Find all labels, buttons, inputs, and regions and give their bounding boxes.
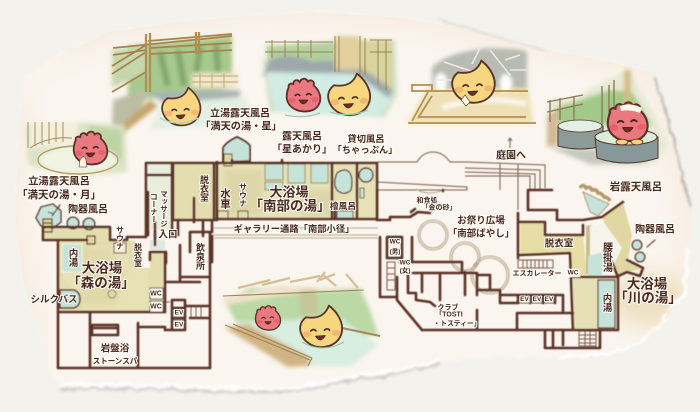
label: 飲泉所: 飲泉所: [195, 242, 205, 271]
label: トスティー: ・トスティー」: [433, 320, 481, 328]
illustration: stone tub bath: [408, 48, 536, 123]
label: 立湯露天風呂 月: 立湯露天風呂: [28, 174, 90, 188]
peach wash: [18, 16, 688, 336]
label: TOSTI: 「TOSTI: [435, 310, 463, 318]
label: EV upper: EV: [175, 310, 184, 316]
thin walls and circles: [92, 152, 596, 346]
baths: 川の湯: [580, 186, 645, 328]
label: 庭園へ: 庭園へ: [496, 148, 526, 162]
arrow to garden: [508, 138, 512, 148]
label: 脱衣室 east: 脱衣室: [545, 238, 573, 250]
illustration: rotenburo 星あかり: [263, 36, 397, 117]
label: エスカレーター: エスカレーター: [512, 268, 562, 278]
label: 満天の湯 月: 「満天の湯・月」: [17, 188, 101, 201]
label: 脱衣室 west: 脱衣室: [134, 242, 142, 267]
label: 陶器風呂 west: 陶器風呂: [68, 202, 108, 216]
label: クラブ: クラブ: [438, 302, 458, 312]
label: ギャラリー通路: ギャラリー通路「南部小径」: [234, 223, 354, 234]
label: 水車: 水車: [219, 187, 231, 210]
label: 金の砂: 「金の砂」: [422, 202, 456, 212]
walls: [43, 160, 377, 368]
label: 露天風呂: 露天風呂: [282, 130, 322, 142]
label: ちゃっぷん: 「ちゃっぷん」: [332, 145, 398, 155]
label: 女: (女): [400, 266, 410, 274]
area: 川の湯 floor: [520, 202, 644, 330]
label: 南部の湯: 「南部の湯」: [250, 198, 330, 214]
illustration: pottery baths: [547, 70, 668, 165]
label: EV 1: EV: [520, 296, 529, 303]
label: 南部ばやし: 「南部ばやし」: [448, 228, 514, 240]
label: シルクバス: シルクバス: [30, 294, 78, 306]
white boxes: WC and EV: [150, 238, 580, 329]
label: 入口: 入口: [158, 230, 178, 240]
leader line: 月: [52, 205, 60, 216]
area: 森の湯 floor: [44, 163, 172, 312]
label: 内湯 east: 内湯: [600, 292, 612, 313]
label: 大浴場 川の湯: 大浴場: [627, 276, 668, 292]
label: 男: (男): [390, 248, 400, 256]
label: 内湯 west: 内湯: [66, 247, 78, 268]
label: 立湯露天風呂 星: 立湯露天風呂: [210, 106, 270, 120]
label: マッサージ: マッサージ: [159, 190, 168, 228]
label: 岩露天風呂: 岩露天風呂: [610, 180, 662, 193]
label: 岩盤浴: 岩盤浴: [101, 342, 130, 354]
label: 腰掛湯: 腰掛湯: [600, 242, 612, 273]
label: WC 男: WC: [390, 238, 401, 246]
baths: 南部の湯: [218, 137, 373, 219]
label: 大浴場 森の湯: 大浴場: [82, 260, 123, 276]
label: サウナ west: サウナ: [116, 226, 124, 250]
illustration: rotenburo 満天の湯・星: [112, 32, 250, 134]
label: EV lower: EV: [175, 322, 184, 328]
label: 星あかり: 「星あかり」: [272, 142, 332, 156]
label: WC 女: WC: [400, 260, 411, 266]
illustration: rotenburo 満天の湯・月: [26, 122, 127, 177]
label: お祭り広場: お祭り広場: [457, 214, 505, 226]
label: サウナ south: サウナ: [238, 183, 248, 207]
leader line: 陶器風呂: [647, 240, 655, 247]
label: EV 3: EV: [545, 296, 554, 303]
label: 貸切風呂: 貸切風呂: [347, 133, 385, 144]
label: コーナー: コーナー: [150, 193, 158, 223]
label: 川の湯: 「川の湯」: [614, 290, 682, 306]
label: 檜風呂: 檜風呂: [330, 200, 356, 211]
label: WC west lower: WC: [150, 304, 162, 310]
label: 和食処: 和食処: [416, 196, 438, 204]
label: ストーンスパ: ストーンスパ: [93, 356, 138, 366]
label: WC west upper: WC: [150, 290, 162, 298]
label: 陶器風呂 east: 陶器風呂: [635, 222, 675, 236]
floor map: [36, 137, 655, 368]
area: 南部の湯 floor: [173, 164, 376, 220]
baths: 森の湯: [36, 204, 126, 308]
label: 脱衣室 south: 脱衣室: [199, 174, 209, 202]
walls: east wing: [377, 190, 643, 348]
labels: [17, 106, 682, 366]
label: 森の湯: 「森の湯」: [67, 274, 135, 290]
label: EV 2: EV: [533, 296, 542, 303]
illustration: indoor bath with roof: [223, 272, 380, 367]
label: WC east: WC: [568, 270, 579, 276]
label: 満天の湯 星: 「満天の湯・星」: [200, 120, 282, 132]
label: 大浴場 南部の湯: 大浴場: [269, 184, 309, 200]
